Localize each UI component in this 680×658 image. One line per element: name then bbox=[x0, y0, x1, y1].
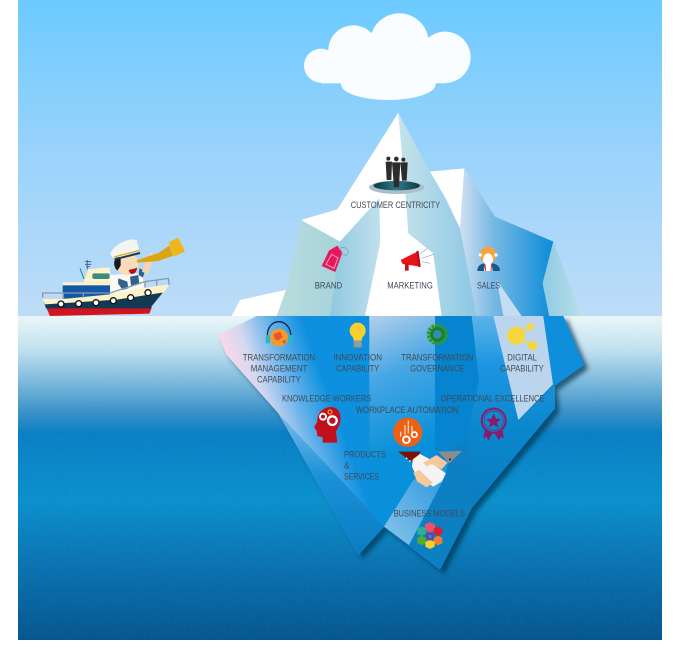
label: marketing: MARKETING bbox=[387, 280, 433, 292]
label: sales: SALES bbox=[477, 280, 500, 292]
icon: green gear bbox=[428, 325, 446, 343]
pale shard bbox=[493, 316, 553, 420]
icon: share network bbox=[507, 323, 537, 350]
cabin bbox=[63, 260, 110, 299]
boat with captain bbox=[43, 238, 185, 316]
label: business models: BUSINESS MODELS bbox=[394, 508, 465, 520]
left mass bbox=[218, 316, 384, 555]
label: workplace automation: WORKPLACE AUTOMATION bbox=[356, 405, 459, 416]
icon: head with gears bbox=[314, 407, 341, 443]
cloud bbox=[304, 13, 471, 100]
deck bbox=[43, 284, 169, 304]
right wedge bbox=[543, 316, 584, 387]
label: transformation management capability bbox=[243, 352, 315, 386]
centre band bbox=[369, 316, 435, 527]
label: digital capability bbox=[500, 352, 544, 374]
label: transformation governance: TRANSFORMATION bbox=[401, 352, 473, 364]
dark strip bbox=[435, 316, 479, 467]
label: innovation capability: INNOVATION bbox=[333, 352, 382, 364]
iceberg below water bbox=[218, 316, 584, 570]
light strip bbox=[467, 316, 555, 508]
label: digital capability: CAPABILITY bbox=[500, 364, 544, 374]
icon: light bulb bbox=[350, 323, 366, 347]
portholes bbox=[58, 290, 151, 307]
label: transformation management capability: CAPABILITY bbox=[257, 374, 301, 386]
icon: hexagon cluster bbox=[417, 522, 442, 549]
lower light wedge bbox=[384, 457, 450, 545]
label: products and services: SERVICES bbox=[344, 472, 379, 482]
icon: brand tag bbox=[322, 246, 348, 272]
icon: excellence medal bbox=[482, 409, 506, 441]
label: customer centricity: CUSTOMER CENTRICITY bbox=[351, 200, 441, 211]
label: knowledge workers: KNOWLEDGE WORKERS bbox=[282, 394, 371, 404]
label: operational excellence: OPERATIONAL EXCELLENCE bbox=[441, 394, 544, 404]
railing bbox=[43, 278, 169, 299]
label: products and services: & bbox=[344, 460, 350, 472]
label: transformation management capability: TRANSFORMATION bbox=[243, 352, 315, 364]
sea background bbox=[18, 316, 662, 640]
label: products and services: PRODUCTS bbox=[344, 450, 386, 460]
captain bbox=[110, 238, 185, 294]
label: products and services bbox=[344, 450, 386, 482]
label: transformation governance: GOVERNANCE bbox=[410, 364, 464, 374]
icon: customers on platform bbox=[369, 157, 424, 194]
back right mass bbox=[370, 316, 584, 570]
sky background bbox=[18, 0, 662, 316]
label: innovation capability: CAPABILITY bbox=[336, 364, 380, 374]
icon: workplace automation bbox=[393, 418, 422, 447]
label: digital capability: DIGITAL bbox=[507, 352, 537, 364]
label: innovation capability bbox=[333, 352, 382, 374]
icon: globe with headset bbox=[266, 322, 293, 347]
icon: megaphone bbox=[401, 248, 435, 271]
icon: handshake bbox=[398, 451, 462, 487]
label: brand: BRAND bbox=[315, 280, 342, 292]
label: transformation governance bbox=[401, 352, 473, 374]
iceberg above water bbox=[232, 113, 582, 316]
lower left band bbox=[278, 413, 384, 555]
icon: sales agent bbox=[477, 247, 500, 271]
label: transformation management capability: MANAGEMENT bbox=[251, 364, 308, 374]
hull bbox=[44, 291, 164, 316]
